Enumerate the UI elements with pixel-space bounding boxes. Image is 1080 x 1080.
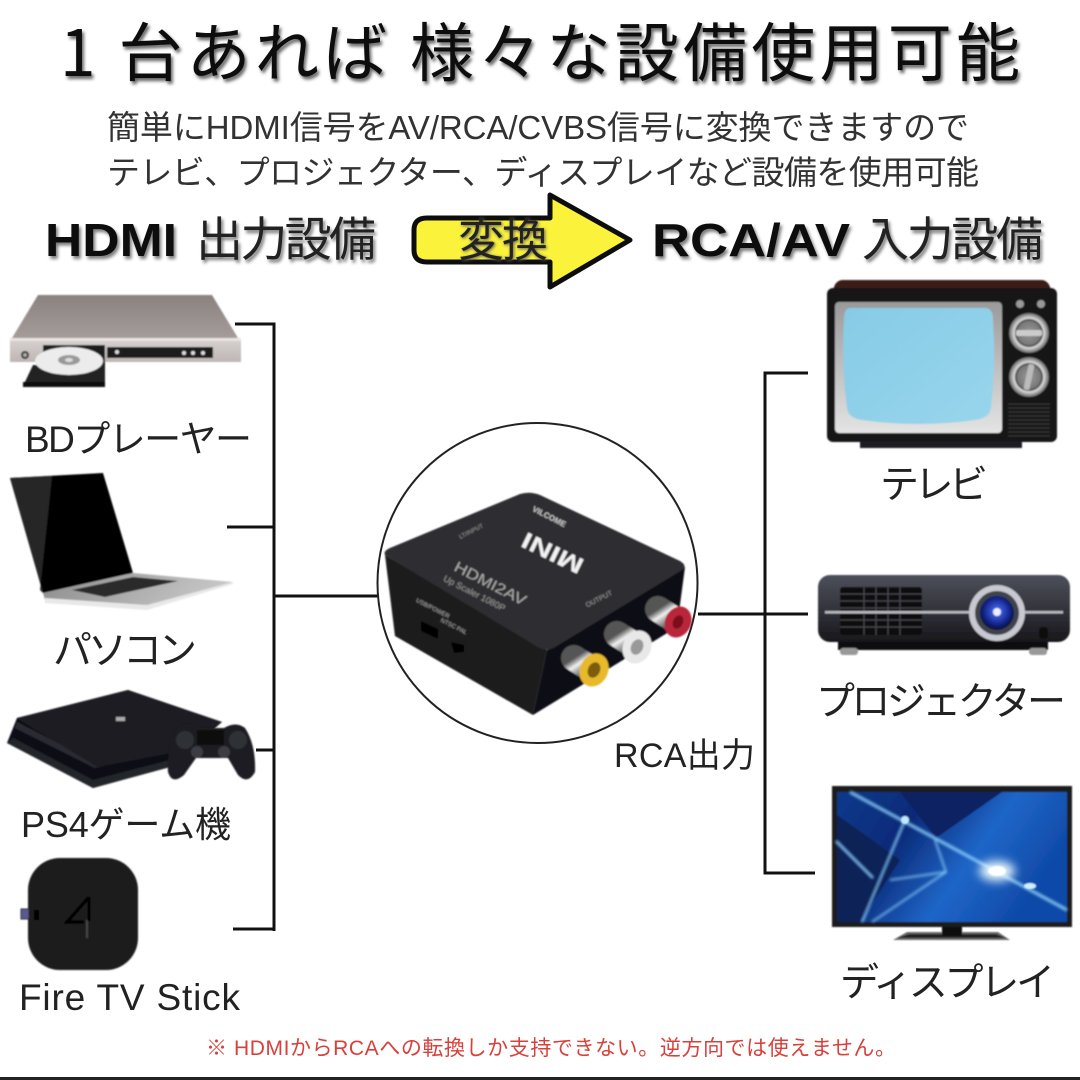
RCA jack: yellow xyxy=(574,649,614,691)
adapter: HDMI2AV converter: VILCOME xyxy=(531,504,568,529)
adapter: HDMI2AV converter: HDMI2AV xyxy=(451,558,529,609)
icon: PS4 console xyxy=(7,690,222,788)
arrow: conversion: 変換 xyxy=(459,205,549,271)
icon: projector xyxy=(818,575,1070,655)
title: 1 台あれば 様々な設備使用可能 xyxy=(62,6,1022,98)
label: Fire TV Stick: Fire TV Stick xyxy=(19,977,240,1018)
red note: ※ HDMIからRCAへの転換しか支持できない。逆方向では使えません。 xyxy=(206,1037,896,1060)
heading: RCA/AV input devices xyxy=(652,201,1045,273)
arrow: conversion: 変換 xyxy=(458,204,548,270)
label: TV: テレビ xyxy=(880,464,988,507)
RCA jack: white xyxy=(617,626,657,668)
heading: RCA/AV input devices: RCA/AV xyxy=(654,217,852,269)
icon: game controller xyxy=(168,724,255,779)
label: BD player: BDプレーヤー xyxy=(25,419,252,460)
heading: HDMI output devices xyxy=(45,201,378,273)
heading: HDMI output devices: 出力設備 xyxy=(196,201,376,270)
label: RCA output: RCA出力 xyxy=(614,737,755,775)
icon: retro TV xyxy=(827,280,1057,448)
adapter: HDMI2AV converter: USB/POWER xyxy=(415,598,451,620)
heading: RCA/AV input devices: 入力設備 xyxy=(864,204,1045,273)
adapter: HDMI2AV converter: MINI xyxy=(517,527,588,579)
subtitle: テレビ、プロジェクター、ディスプレイなど設備を使用可能 xyxy=(107,154,979,191)
adapter: HDMI2AV converter: NTSC PAL xyxy=(439,618,468,637)
adapter: HDMI2AV converter: Up Scaler 1080P xyxy=(442,573,507,613)
icon: BD player xyxy=(10,295,241,387)
heading: RCA/AV input devices: 入力設備 xyxy=(862,201,1043,270)
RCA jack: red xyxy=(658,602,697,642)
adapter circle xyxy=(378,423,698,743)
icon: laptop xyxy=(10,473,233,610)
icon: flat-screen display xyxy=(832,786,1072,940)
arrow: conversion xyxy=(414,195,630,287)
subtitle: 簡単にHDMI信号をAV/RCA/CVBS信号に変換できますので xyxy=(107,109,969,146)
label: projector: プロジェクター xyxy=(816,681,1066,724)
adapter: HDMI2AV converter xyxy=(385,493,697,715)
bottom edge band xyxy=(0,1077,1080,1080)
connector lines: right bracket xyxy=(698,372,815,874)
heading: HDMI output devices: 出力設備 xyxy=(198,204,378,273)
connector lines: left bracket xyxy=(227,322,382,931)
heading: HDMI output devices: HDMI xyxy=(45,214,177,266)
adapter: HDMI2AV converter: LT/INPUT xyxy=(458,523,485,541)
icon: Fire TV Stick xyxy=(21,858,138,970)
subtitle xyxy=(107,109,979,191)
adapter: HDMI2AV converter: OUTPUT xyxy=(585,590,614,609)
heading: HDMI output devices: HDMI xyxy=(47,217,179,269)
label: PC: パソコン xyxy=(53,630,197,673)
label: PS4 game console: PS4ゲーム機 xyxy=(21,804,231,845)
heading: RCA/AV input devices: RCA/AV xyxy=(652,214,850,266)
title: 1 台あれば 様々な設備使用可能 xyxy=(60,3,1020,95)
label: display: ディスプレイ xyxy=(840,962,1055,1005)
